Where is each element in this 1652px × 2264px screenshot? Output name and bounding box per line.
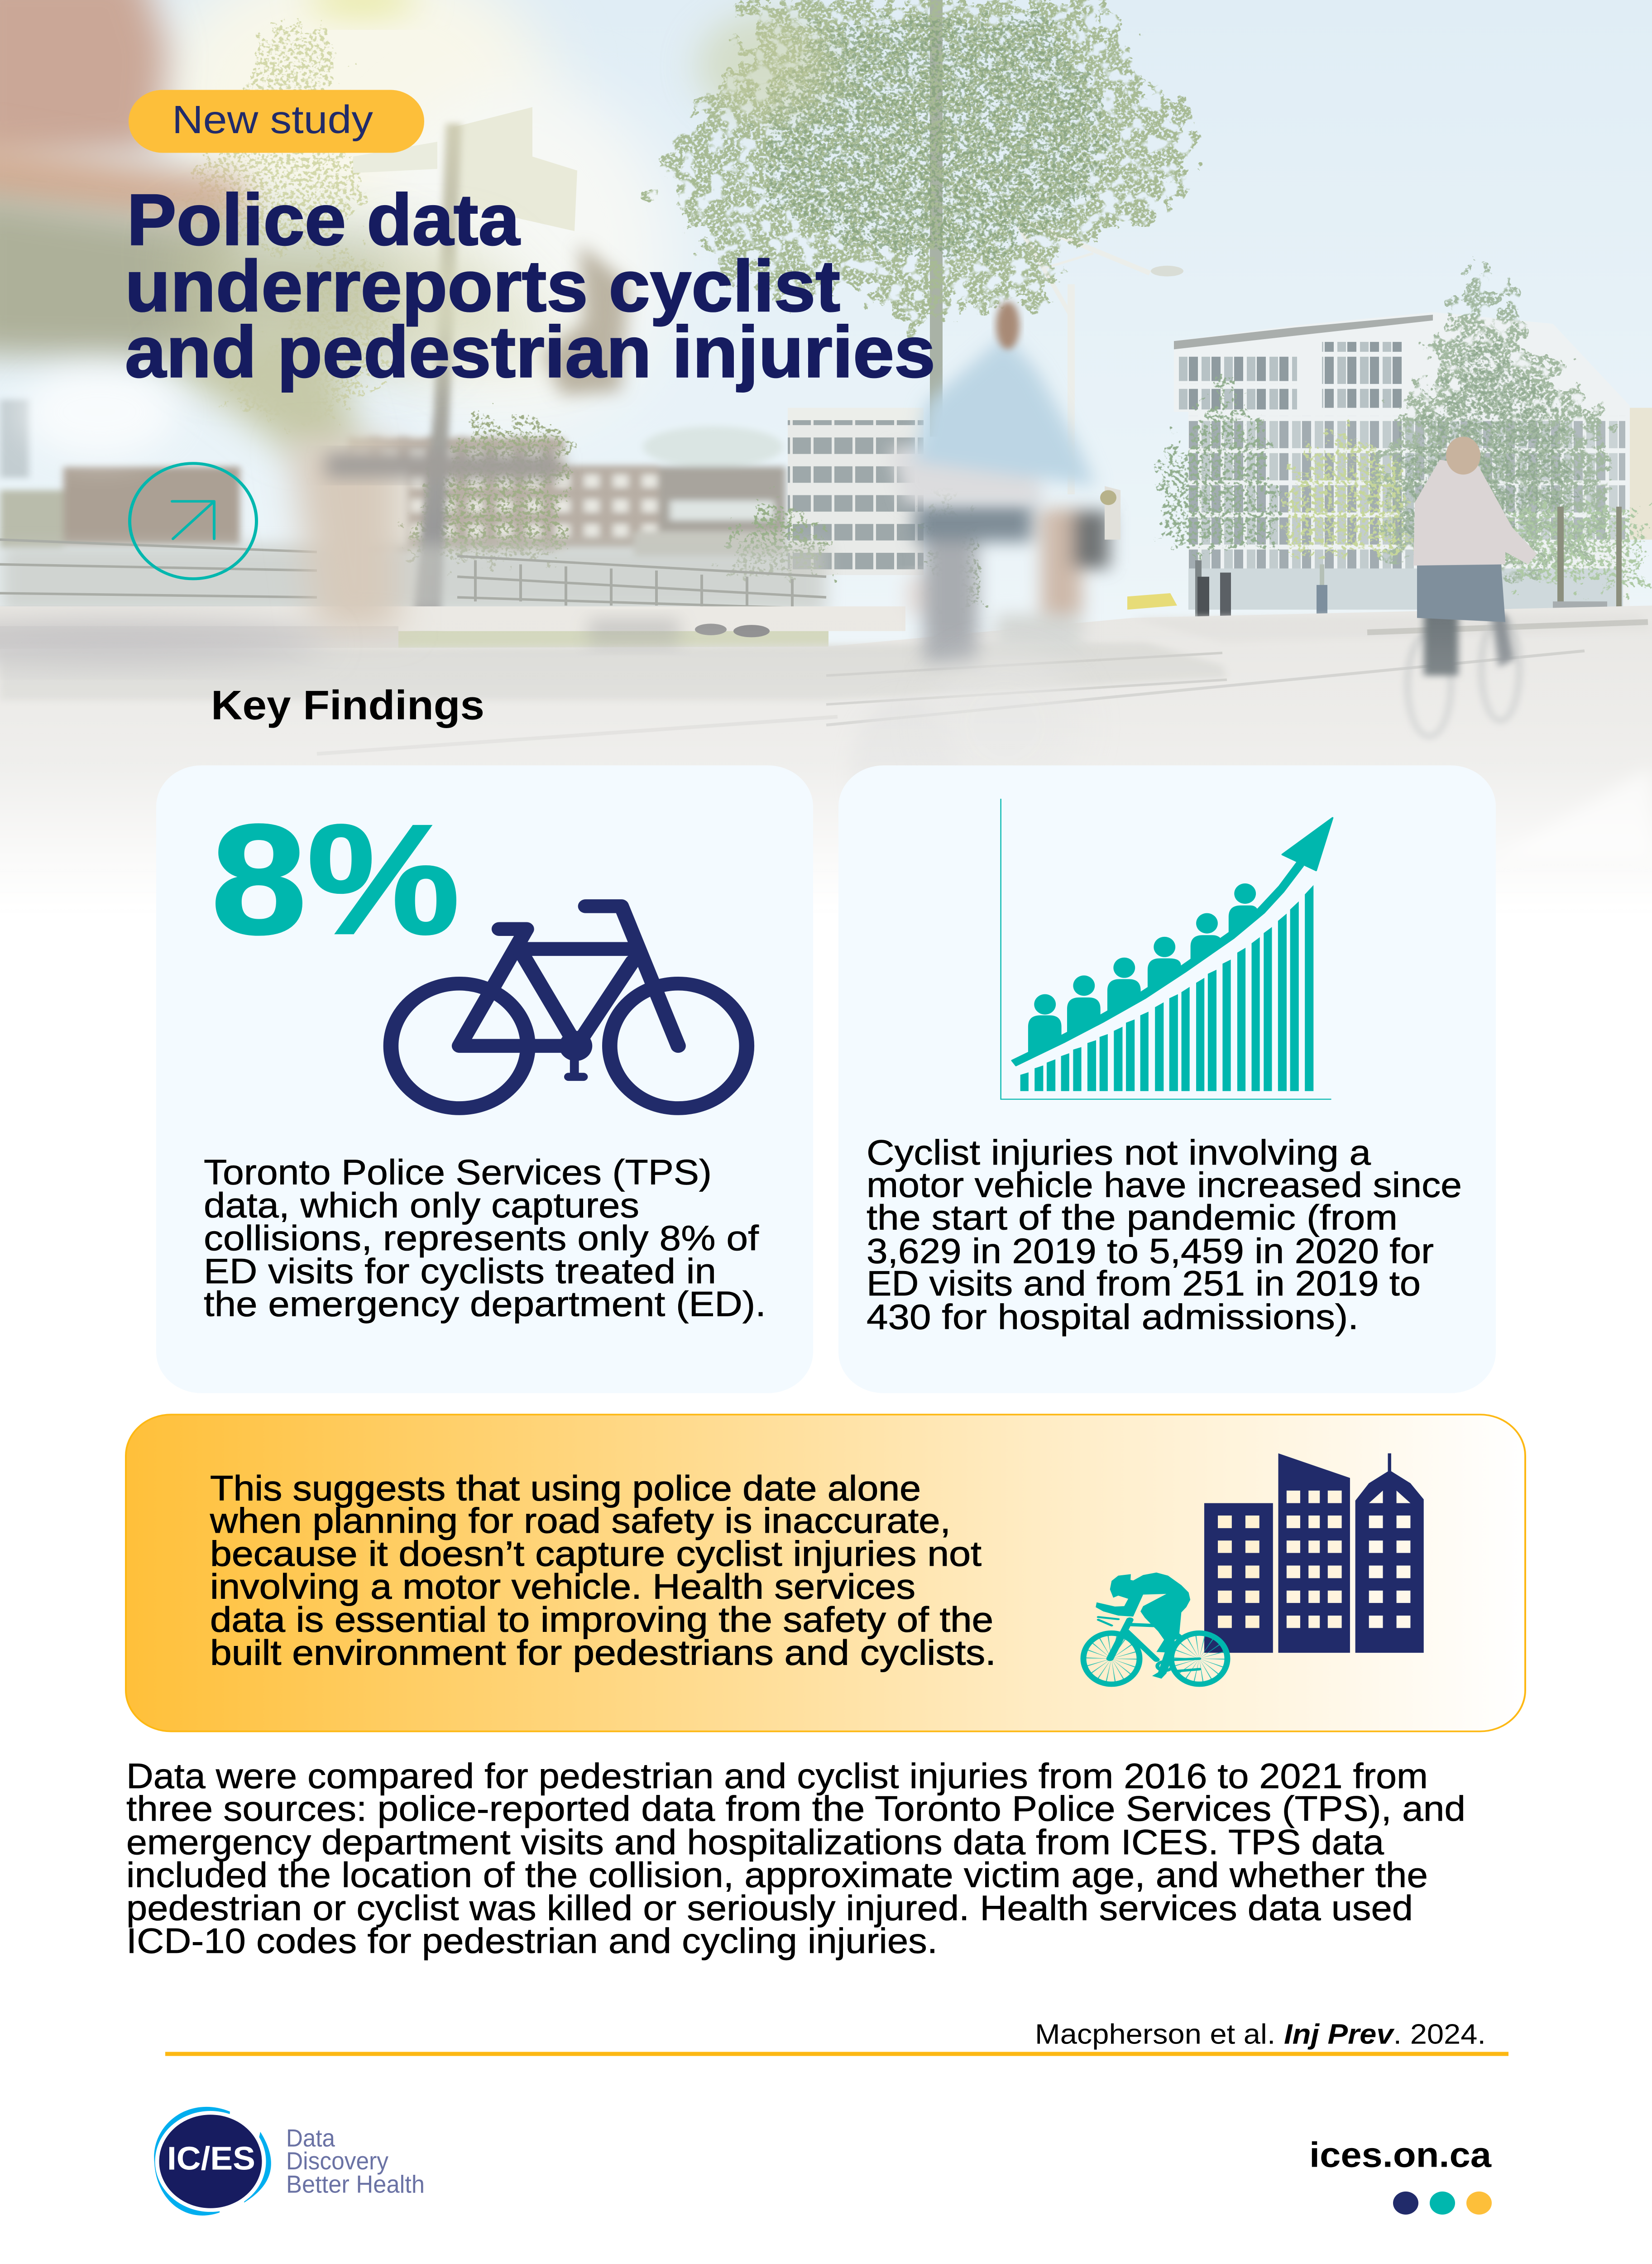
text: study methods: pedestrian or cyclist was killed or seriously injured. Health services data used [126,1889,1413,1928]
logo: IC/ES: IC/ES [167,2140,255,2177]
photo: right building [1174,312,1630,609]
photo: left tree foliage [190,25,394,420]
heading: Key Findings: Key Findings [211,682,484,728]
photo: bottom fade [0,618,1652,913]
text: TPS finding: the emergency department (ED). [204,1285,766,1324]
logo tagline: Data [286,2125,335,2152]
panel: 8 percent finding [156,765,813,1393]
photo: railing and walls [0,540,964,651]
icon: city buildings [1204,1453,1424,1653]
photo: pavement and road [0,605,1652,912]
text: study methods [126,1757,1465,1961]
background photo: street with cyclists [0,0,1652,913]
website address: ices.on.ca [1309,2135,1492,2174]
text: injury counts: Cyclist injuries not involving a [867,1133,1371,1172]
badge: New study: New study [172,98,373,142]
icon: racing cyclist [1083,1573,1227,1684]
photo: blurred cyclist centre [851,302,1120,853]
text: study methods: three sources: police-reported data from the Toronto Police Services (TPS), and [126,1789,1465,1828]
logo tagline: Better Health [286,2171,425,2198]
photo: right tree [1376,264,1612,581]
text: TPS finding [204,1153,766,1324]
text: callout message: This suggests that using police date alone [210,1469,921,1508]
photo: far pedestrians and tree trunks [1127,507,1622,622]
photo: blurred foreground cyclist left [0,0,575,663]
stat: 8%: 8% [211,791,460,967]
title [125,179,935,393]
icon: bicycle [391,906,747,1108]
chart: rising bars, people and arrow [1001,799,1332,1099]
title: underreports cyclist [125,245,840,326]
text: TPS finding: Toronto Police Services (TPS) [204,1153,712,1192]
photo: lamp post [1019,222,1183,494]
photo: street trees [403,381,1643,605]
callout: implication for road safety [126,1415,1525,1732]
photo: left brown buildings [0,427,785,556]
text: callout message: when planning for road safety is inaccurate, [210,1501,951,1540]
logo tagline [286,2125,425,2198]
title: and pedestrian injuries [125,312,935,393]
photo: brown blurred mudguard shape [543,243,629,395]
photo: far left tower [0,399,29,478]
photo: sign boards and post [353,107,577,634]
text: injury counts: ED visits and from 251 in 2019 to [867,1264,1421,1303]
citation: Macpherson et al. Inj Prev. 2024. [1035,2018,1486,2050]
text: study methods: ICD-10 codes for pedestrian and cycling injuries. [126,1922,938,1961]
brand dots [1393,2192,1492,2215]
text: TPS finding: collisions, represents only 8% of [204,1219,759,1258]
panel: rising cyclist injuries [838,765,1496,1393]
icon: circled arrow [129,463,256,579]
logo tagline: Discovery [286,2147,388,2175]
logo: IC/ES [154,2107,425,2216]
text: injury counts [867,1133,1462,1337]
text: study methods: emergency department visits and hospitalizations data from ICES. TPS data [126,1823,1384,1862]
text: callout message: because it doesn’t capture cyclist injuries not [210,1534,982,1573]
photo: cyclist right [1408,436,1537,737]
text: callout message: built environment for pedestrians and cyclists. [210,1633,996,1672]
text: study methods: Data were compared for pedestrian and cyclist injuries from 2016 to 2021 from [126,1757,1428,1796]
photo: beige building far right [1625,408,1652,540]
photo: central tree [661,0,1195,436]
text: injury counts: motor vehicle have increased since [867,1166,1462,1205]
text: callout message: involving a motor vehicle. Health services [210,1567,915,1607]
text: study methods: included the location of the collision, approximate victim age, and whether the [126,1856,1428,1895]
footer rule [165,2052,1508,2056]
title: Police data [127,179,520,260]
text: callout message: data is essential to improving the safety of the [210,1600,993,1640]
badge: New study [129,90,424,153]
text: TPS finding: data, which only captures [204,1186,639,1225]
photo: white apartment block [788,410,924,575]
text: TPS finding: ED visits for cyclists treated in [204,1252,716,1291]
text: injury counts: the start of the pandemic (from [867,1198,1398,1238]
text: callout message [210,1469,996,1672]
text: injury counts: 430 for hospital admissions). [867,1297,1359,1337]
text: injury counts: 3,629 in 2019 to 5,459 in 2020 for [867,1232,1434,1271]
